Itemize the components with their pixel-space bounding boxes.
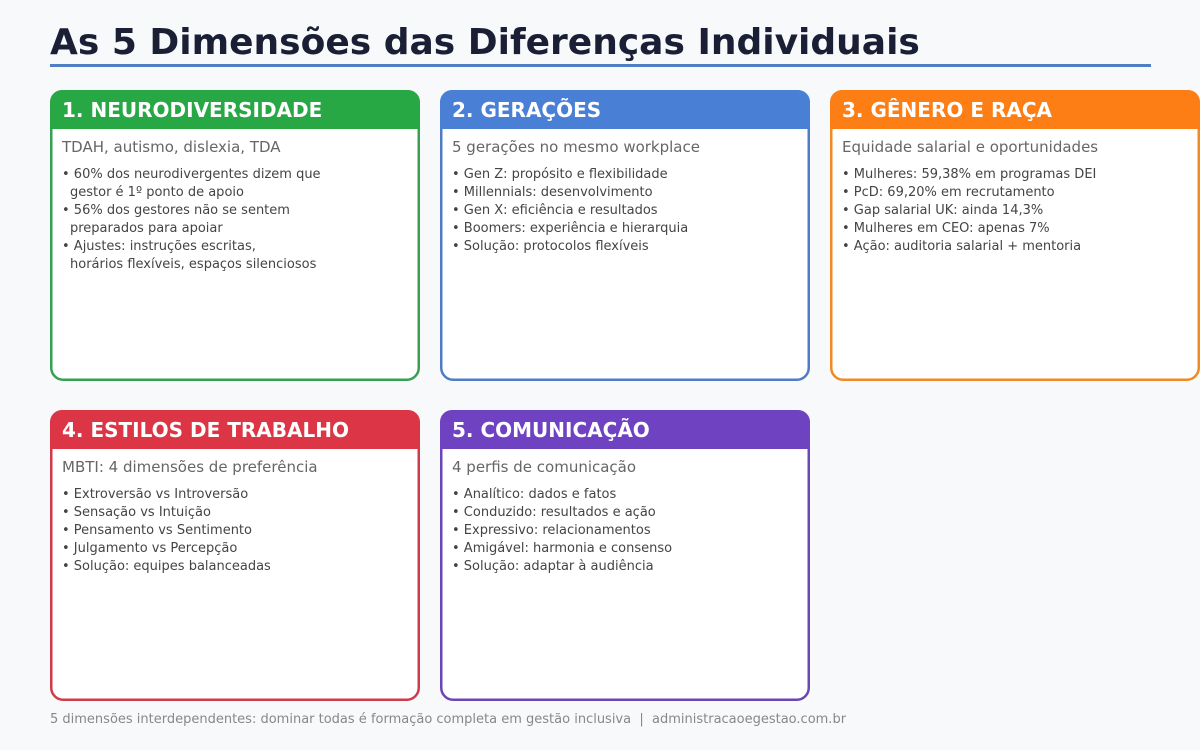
panel: 2. Gerações: • Solução: protocolos flexíveis [452, 239, 649, 254]
panel: 2. Gerações [440, 90, 810, 380]
panel: 4. Estilos de Trabalho: • Julgamento vs Percepção [62, 541, 237, 556]
panel: 5. Comunicação: • Expressivo: relacionamentos [452, 523, 651, 538]
panel: 1. Neurodiversidade: • 60% dos neurodivergentes dizem que [62, 167, 321, 182]
panel: 1. Neurodiversidade: gestor é 1º ponto de apoio [70, 185, 244, 200]
panel: 1. Neurodiversidade: • Ajustes: instruções escritas, [62, 239, 256, 254]
panel: 5. Comunicação [440, 410, 810, 700]
panel: 3. Gênero e Raça: • PcD: 69,20% em recrutamento [842, 185, 1055, 200]
panel: 2. Gerações: • Millennials: desenvolvimento [452, 185, 653, 200]
panel: 4. Estilos de Trabalho: • Sensação vs Intuição [62, 505, 211, 520]
panel: 4. Estilos de Trabalho: • Extroversão vs Introversão [62, 487, 248, 502]
panel: 4. Estilos de Trabalho [50, 410, 420, 700]
panel: 2. Gerações: • Boomers: experiência e hierarquia [452, 221, 688, 236]
panel: 5. Comunicação: • Analítico: dados e fatos [452, 487, 616, 502]
panel: 4. Estilos de Trabalho: MBTI: 4 dimensões de preferência [62, 458, 318, 476]
panel: 4. Estilos de Trabalho: 4. ESTILOS DE TRABALHO [62, 418, 349, 442]
panel: 4. Estilos de Trabalho: • Pensamento vs Sentimento [62, 523, 252, 538]
panel: 4. Estilos de Trabalho: • Solução: equipes balanceadas [62, 559, 271, 574]
footer note: 5 dimensões interdependentes: dominar todas é formação completa em gestão inclusiva | administracaoegestao.com.br [50, 712, 847, 727]
panel: 3. Gênero e Raça: Equidade salarial e oportunidades [842, 138, 1098, 156]
panel: 3. Gênero e Raça: • Mulheres em CEO: apenas 7% [842, 221, 1050, 236]
panel: 2. Gerações: 2. GERAÇÕES [452, 98, 601, 122]
panel: 3. Gênero e Raça: • Gap salarial UK: ainda 14,3% [842, 203, 1043, 218]
panel: 5. Comunicação: • Solução: adaptar à audiência [452, 559, 654, 574]
panel: 2. Gerações: • Gen Z: propósito e flexibilidade [452, 167, 668, 182]
panel: 5. Comunicação: • Amigável: harmonia e consenso [452, 541, 672, 556]
panel: 1. Neurodiversidade: • 56% dos gestores não se sentem [62, 203, 290, 218]
panel: 3. Gênero e Raça: • Mulheres: 59,38% em programas DEI [842, 167, 1096, 182]
panel: 3. Gênero e Raça [830, 90, 1200, 380]
panel: 5. Comunicação: • Conduzido: resultados e ação [452, 505, 656, 520]
panel: 5. Comunicação: 5. COMUNICAÇÃO [452, 418, 650, 442]
panel: 2. Gerações: • Gen X: eficiência e resultados [452, 203, 658, 218]
panel: 1. Neurodiversidade: horários flexíveis, espaços silenciosos [70, 257, 317, 272]
panel: 3. Gênero e Raça: 3. GÊNERO E RAÇA [842, 98, 1053, 122]
panel: 1. Neurodiversidade: 1. NEURODIVERSIDADE [62, 98, 322, 122]
panel: 2. Gerações: 5 gerações no mesmo workplace [452, 138, 700, 156]
panel: 1. Neurodiversidade: TDAH, autismo, dislexia, TDA [61, 138, 281, 156]
title: As 5 Dimensões das Diferenças Individuais [50, 22, 920, 63]
panel: 1. Neurodiversidade [50, 90, 420, 380]
panel: 5. Comunicação: 4 perfis de comunicação [452, 458, 636, 476]
panel: 3. Gênero e Raça: • Ação: auditoria salarial + mentoria [842, 239, 1081, 254]
panel: 1. Neurodiversidade: preparados para apoiar [70, 221, 223, 236]
